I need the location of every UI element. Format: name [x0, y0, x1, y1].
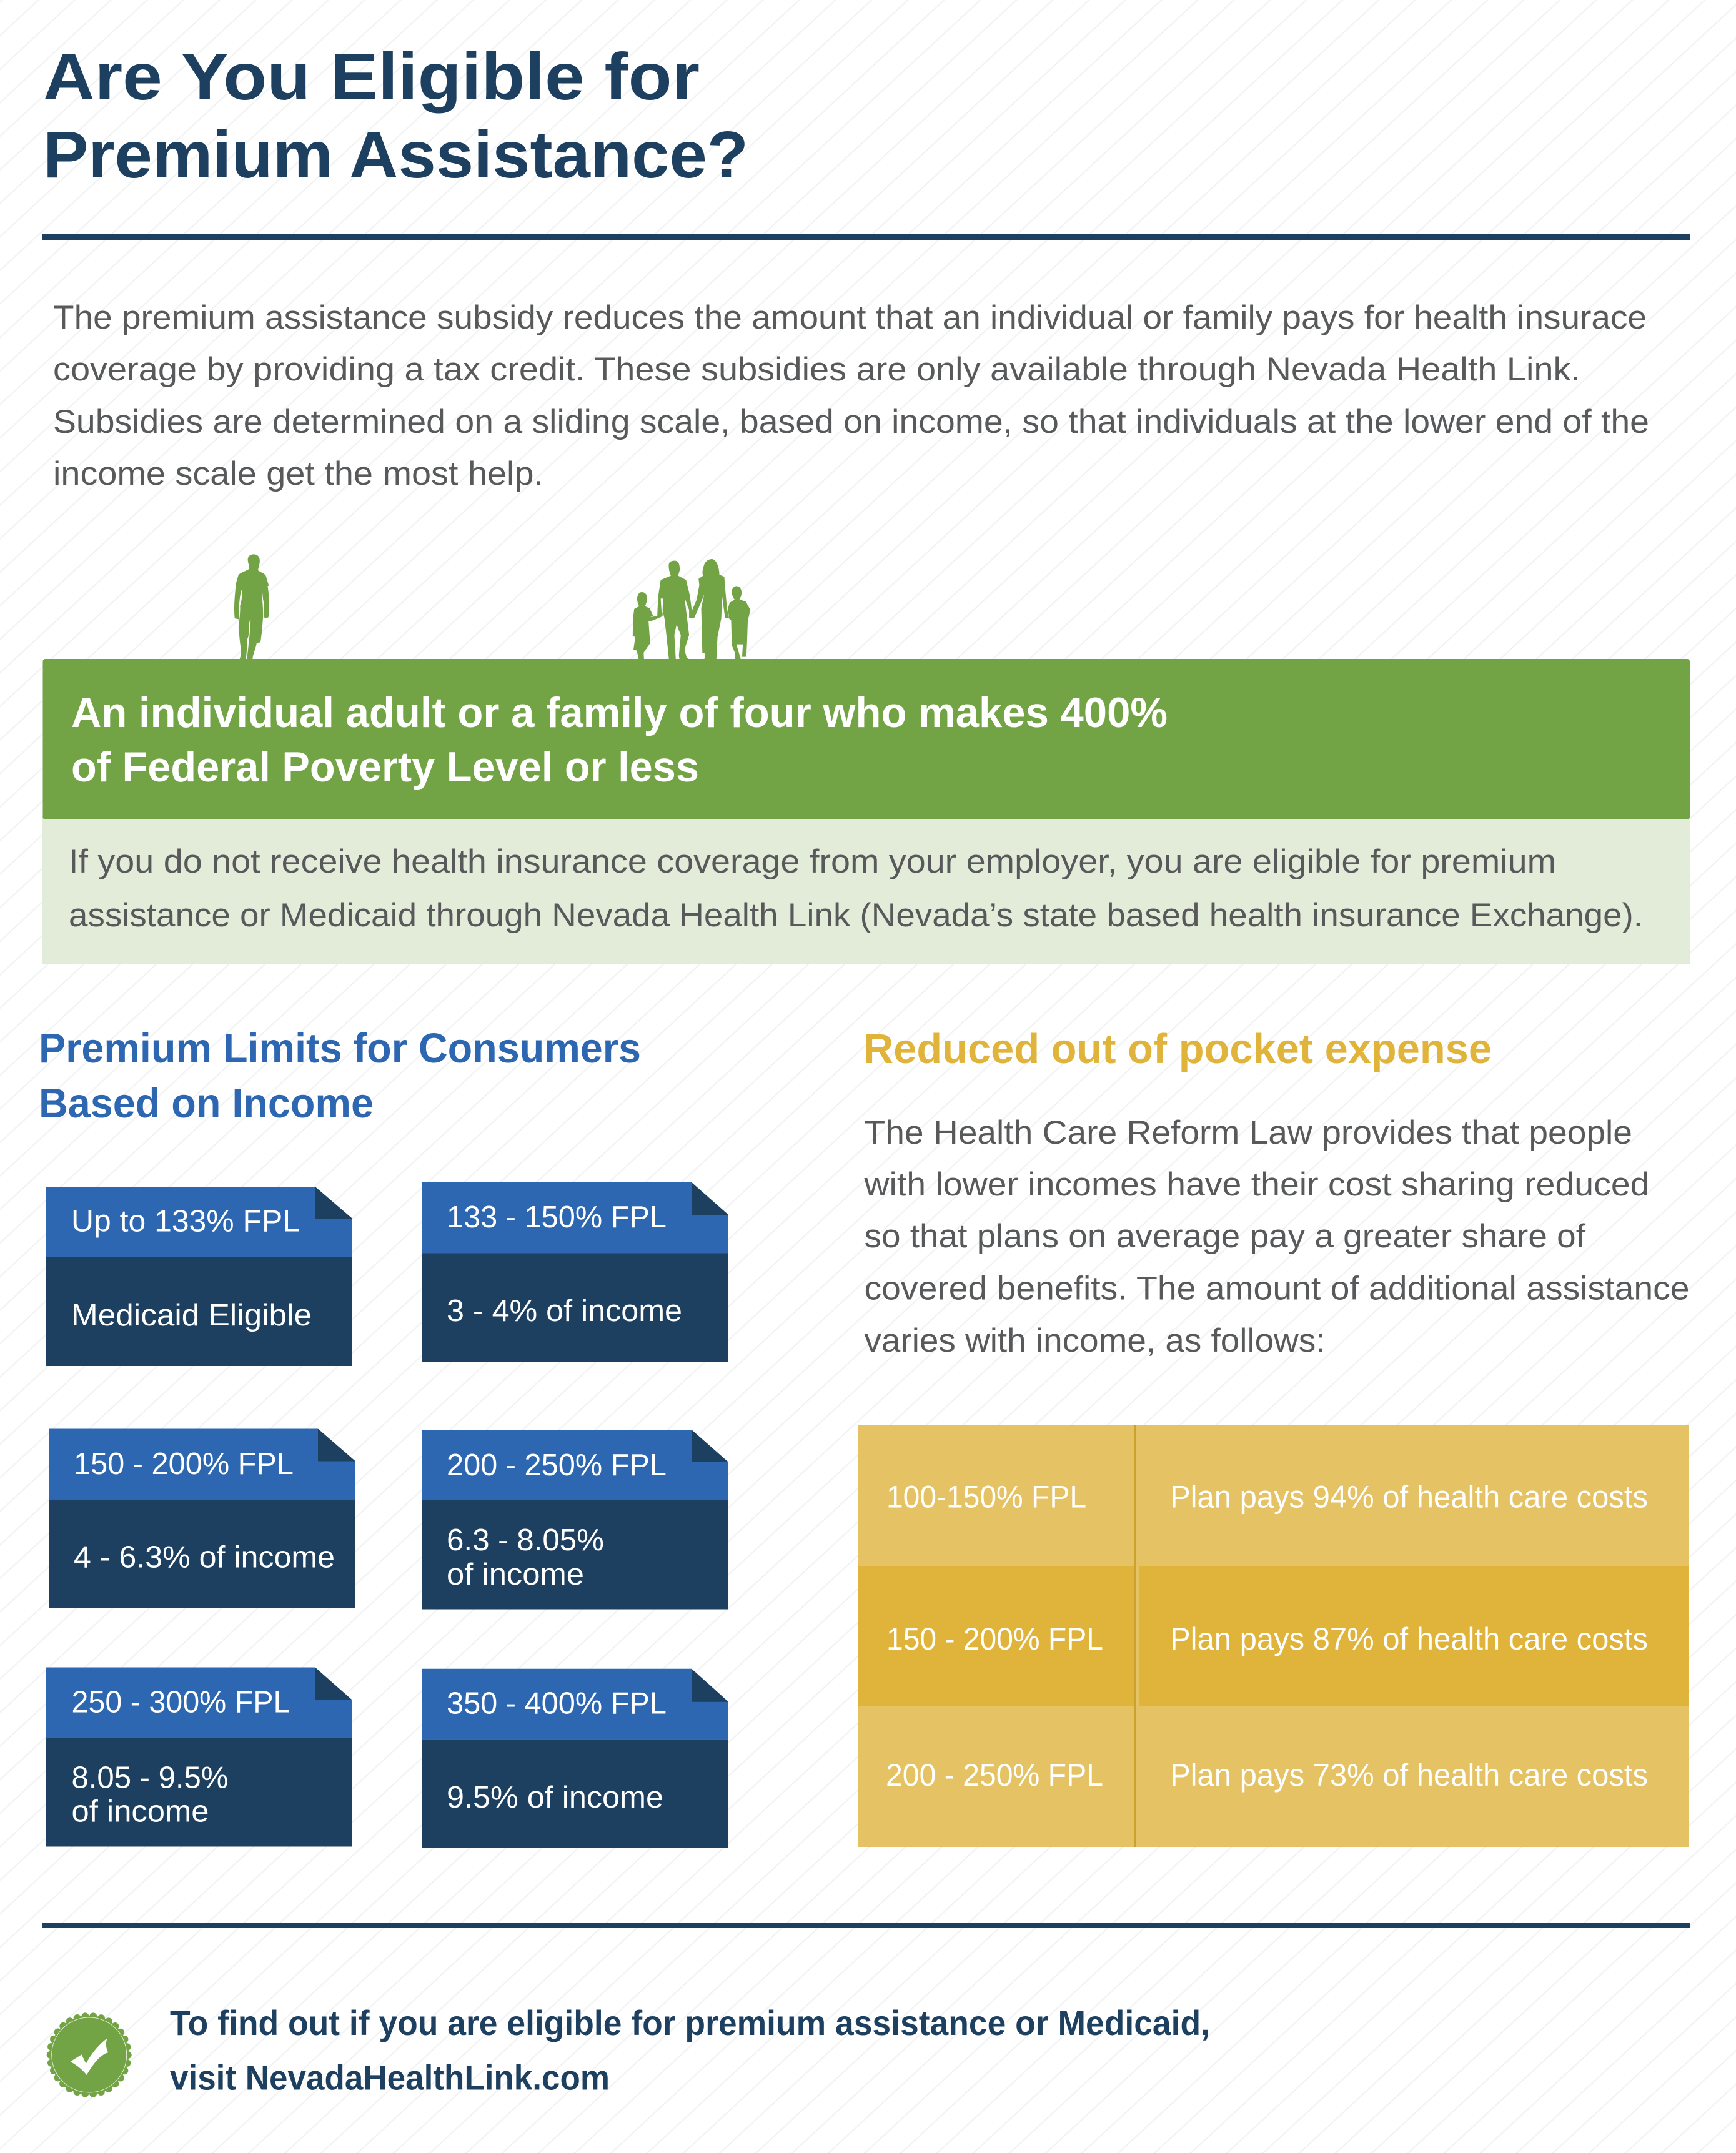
card: 150 - 200% FPL	[49, 1429, 355, 1608]
title: Are You Eligible for	[43, 40, 700, 114]
text block: cost sharing explanation	[863, 1114, 1689, 1359]
card: 133 - 150% FPL	[422, 1182, 728, 1362]
text block: cost sharing explanation: covered benefits. The amount of additional assistance	[865, 1270, 1689, 1307]
heading: premium limits: Based on Income	[39, 1080, 374, 1127]
table: plan pays by FPL	[858, 1425, 1689, 1847]
card: 250 - 300% FPL: of income	[71, 1795, 209, 1829]
table row: 100-150% FPL	[886, 1479, 1648, 1514]
title	[43, 40, 748, 192]
card: 250 - 300% FPL	[46, 1668, 352, 1846]
heading: reduced out of pocket expense: Reduced out of pocket expense	[863, 1026, 1492, 1072]
text block: cost sharing explanation: varies with income, as follows:	[865, 1322, 1326, 1359]
intro paragraph: Subsidies are determined on a sliding scale, based on income, so that individuals at the lower end of the	[53, 403, 1649, 440]
intro paragraph	[53, 299, 1649, 492]
card: 133 - 150% FPL: 3 - 4% of income	[447, 1294, 682, 1328]
card: 350 - 400% FPL: 350 - 400% FPL	[447, 1687, 667, 1721]
icon: individual adult silhouette	[234, 554, 269, 660]
panel: eligibility note: assistance or Medicaid through Nevada Health Link (Nevada’s state based health insurance Exchange).	[69, 897, 1643, 934]
panel: eligibility banner	[42, 659, 1690, 819]
icon: check badge	[50, 2016, 129, 2094]
call to action: visit NevadaHealthLink.com	[170, 2057, 610, 2097]
intro paragraph: income scale get the most help.	[53, 455, 543, 492]
table row: 200 - 250% FPL: Plan pays 73% of health care costs	[1170, 1758, 1648, 1793]
card: 350 - 400% FPL	[422, 1669, 728, 1848]
table row: 100-150% FPL: 100-150% FPL	[886, 1479, 1086, 1514]
panel: eligibility note: If you do not receive health insurance coverage from your employer, you are eligible for premium	[69, 843, 1556, 880]
heading: premium limits	[39, 1025, 641, 1127]
table row: 200 - 250% FPL	[886, 1758, 1648, 1793]
table row: 100-150% FPL: Plan pays 94% of health care costs	[1170, 1479, 1648, 1514]
card: 200 - 250% FPL: of income	[447, 1558, 584, 1591]
card: 150 - 200% FPL: 150 - 200% FPL	[74, 1447, 294, 1481]
text block: cost sharing explanation: with lower incomes have their cost sharing reduced	[863, 1166, 1649, 1203]
table row: 150 - 200% FPL: Plan pays 87% of health care costs	[1170, 1621, 1648, 1656]
card: 200 - 250% FPL	[422, 1430, 728, 1609]
card: 250 - 300% FPL: 250 - 300% FPL	[71, 1686, 290, 1720]
text block: cost sharing explanation: so that plans on average pay a greater share of	[865, 1218, 1585, 1255]
panel: eligibility note	[42, 816, 1690, 964]
call to action: To find out if you are eligible for premium assistance or Medicaid,	[170, 2003, 1210, 2042]
card: 150 - 200% FPL: 4 - 6.3% of income	[74, 1540, 335, 1574]
card: up to 133% FPL: Medicaid Eligible	[71, 1299, 312, 1332]
icon: family of four silhouette	[633, 559, 750, 660]
card: 250 - 300% FPL: 8.05 - 9.5%	[71, 1761, 229, 1795]
table row: 200 - 250% FPL: 200 - 250% FPL	[886, 1758, 1103, 1793]
banner heading: of Federal Poverty Level or less	[71, 743, 699, 791]
intro paragraph: The premium assistance subsidy reduces the amount that an individual or family pays for health insurace	[53, 299, 1647, 336]
card: 133 - 150% FPL: 133 - 150% FPL	[447, 1200, 667, 1234]
card: 200 - 250% FPL: 200 - 250% FPL	[447, 1448, 667, 1482]
call to action	[170, 2003, 1210, 2097]
heading: premium limits: Premium Limits for Consumers	[39, 1025, 641, 1072]
card: up to 133% FPL: Up to 133% FPL	[71, 1204, 300, 1238]
table row: 150 - 200% FPL	[886, 1621, 1648, 1656]
intro paragraph: coverage by providing a tax credit. These subsidies are only available through Nevada Health Link.	[53, 351, 1580, 388]
banner heading: An individual adult or a family of four who makes 400%	[71, 689, 1168, 736]
card: 200 - 250% FPL: 6.3 - 8.05%	[447, 1523, 604, 1557]
text block: cost sharing explanation: The Health Care Reform Law provides that people	[865, 1114, 1632, 1151]
card: 350 - 400% FPL: 9.5% of income	[447, 1781, 663, 1814]
table row: 150 - 200% FPL: 150 - 200% FPL	[886, 1621, 1103, 1656]
banner heading	[71, 689, 1168, 791]
title: Premium Assistance?	[43, 118, 748, 192]
card: up to 133% FPL	[46, 1187, 352, 1366]
